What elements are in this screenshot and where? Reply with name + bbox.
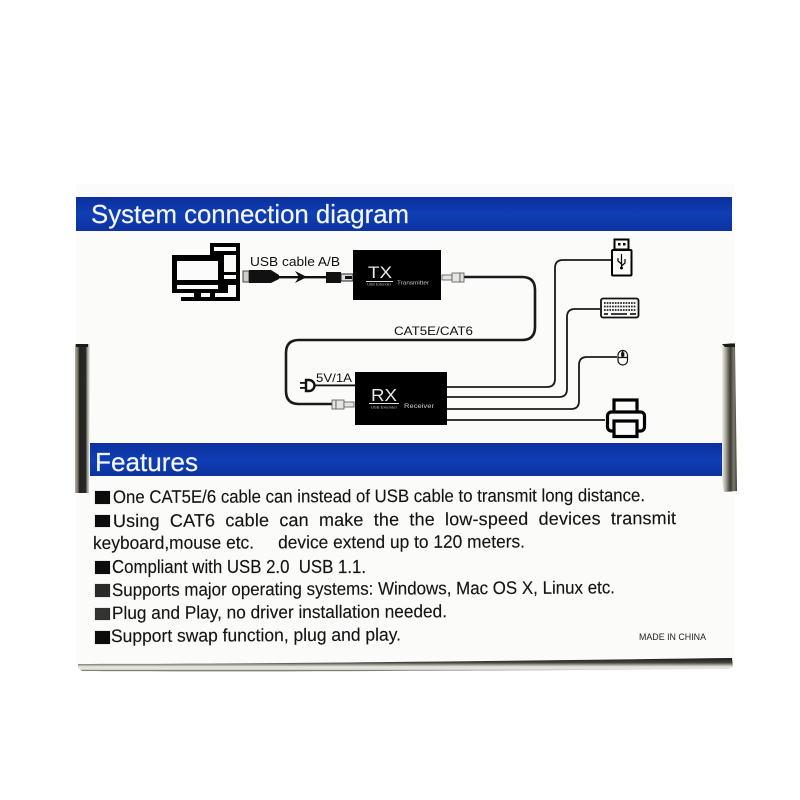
feature: operating systems: Supports major operating systems: Windows, Mac OS X, Linux etc. [112,577,615,600]
icon: USB drive [612,240,632,276]
power plug 5V/1A [300,371,355,391]
panel: box face [76,184,734,666]
label: CAT5E/CAT6: CAT5E/CAT6 [394,324,473,338]
heading bar: Features [90,443,722,477]
feature: one cable: One CAT5E/6 cable can instead of USB cable to transmit long distance. [113,485,645,507]
icon: printer [608,400,644,436]
RX receiver box [355,372,447,425]
feature: USB compliance: Compliant with USB 2.0 USB 1.1. [112,557,366,577]
power plug 5V/1A: 5V/1A [316,371,352,385]
heading bar: System connection diagram: System connection diagram [91,199,409,229]
left side fold [75,344,90,493]
bottom fold [78,658,733,671]
TX transmitter box: TX [368,263,392,282]
output cables [447,260,617,420]
right side fold [722,343,737,492]
feature: CAT6 distance: keyboard,mouse etc. device extend up to 120 meters. [93,531,525,553]
features list [93,485,676,646]
CAT5E/CAT6 cable [286,273,535,409]
heading bar: Features: Features [95,447,198,477]
icon: mouse [618,350,628,365]
heading bar: System connection diagram [76,197,732,231]
label: USB cable A/B: USB cable A/B [250,254,340,269]
feature: swap function: Support swap function, plug and play. [111,624,401,646]
TX transmitter box [353,250,441,300]
TX transmitter box: USB Extender [367,282,392,286]
RX receiver box: RX [371,385,397,405]
USB A/B cable [243,270,353,283]
TX transmitter box: Transmitter [397,280,429,286]
feature: CAT6 distance [93,508,676,553]
RX receiver box: Receiver [404,404,434,410]
icon: computer [172,243,240,301]
feature: plug and play: Plug and Play, no driver installation needed. [112,601,447,623]
RX receiver box: USB Extender [371,406,398,410]
feature: CAT6 distance: Using CAT6 cable can make the the low-speed devices transmit [113,508,676,531]
icon: keyboard [601,298,638,318]
connection diagram [172,240,644,436]
label: MADE IN CHINA: MADE IN CHINA [639,632,706,642]
